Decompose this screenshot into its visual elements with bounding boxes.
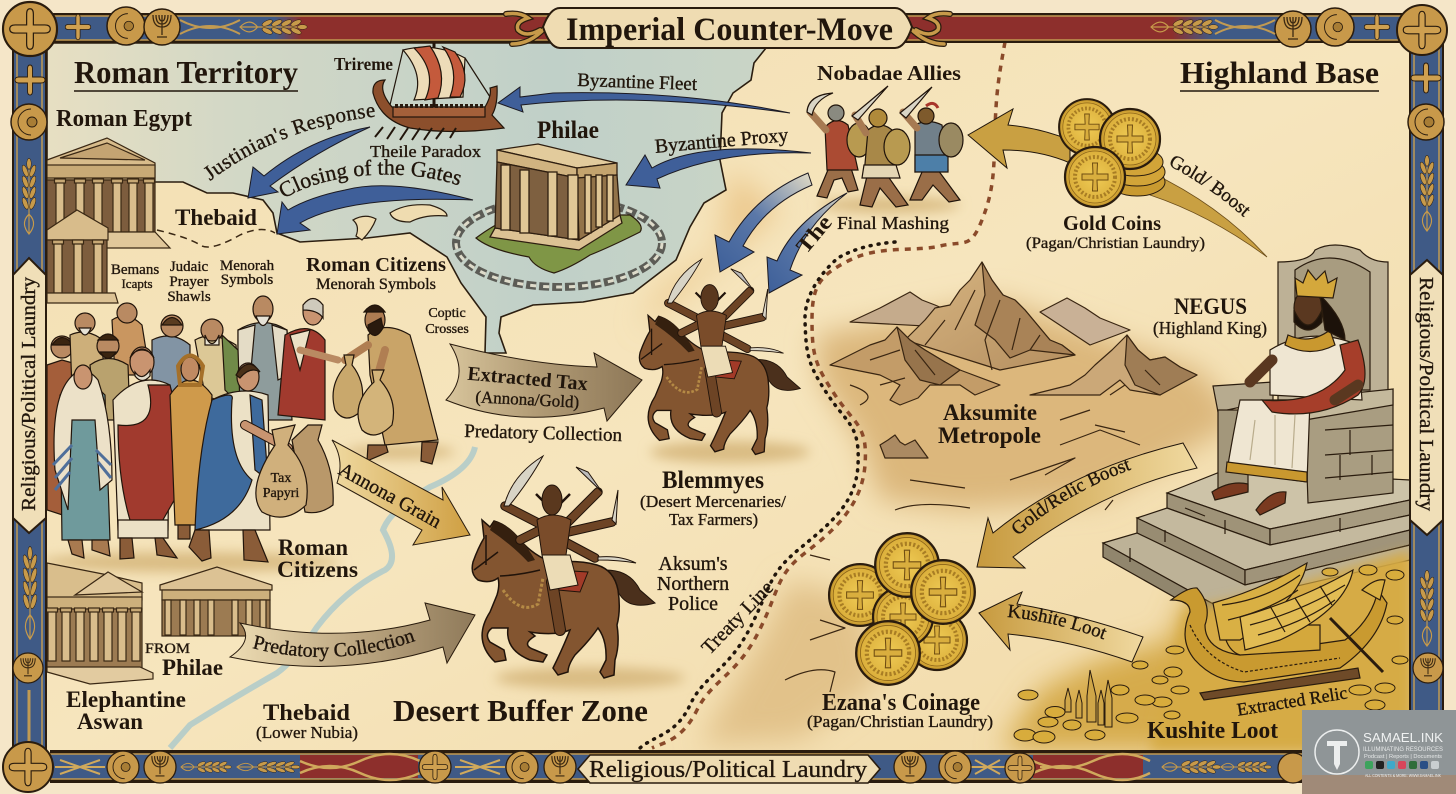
label: Tax Papyri xyxy=(263,471,299,501)
label: Blemmyes: Tax Farmers) xyxy=(669,510,758,529)
label: Final Mashing: Final Mashing xyxy=(837,213,949,233)
man in blue toga with bags xyxy=(189,363,288,562)
label: Menorah Symbols: Symbols xyxy=(221,272,273,288)
label: Extracted Tax: Extracted Tax xyxy=(467,363,589,395)
label: Kushite Loot on arrow: Kushite Loot xyxy=(1007,604,1107,640)
label: Blemmyes: (Desert Mercenaries/ xyxy=(640,492,786,511)
head and crown xyxy=(1294,289,1322,327)
torso xyxy=(1270,336,1362,400)
illustration: Philae temple lower xyxy=(160,567,272,636)
label: Trireme: Trireme xyxy=(334,54,393,74)
label: Extracted Tax: (Annona/Gold) xyxy=(475,387,580,412)
label: Ezana's Coinage: Ezana's Coinage xyxy=(822,690,980,716)
arrow: gold to Nobadae xyxy=(968,109,1070,168)
label: Aksumite Metropole: Metropole xyxy=(938,423,1041,448)
label: Theile Paradox: Theile Paradox xyxy=(370,142,482,161)
arrow: Closing of the Gates xyxy=(277,186,473,234)
illustration: Philae island temple in chains xyxy=(456,144,662,287)
label: Aksumite Metropole xyxy=(938,400,1041,448)
illustration: Aksumite mountains xyxy=(785,262,1197,692)
label: Byzantine Proxy: Byzantine Proxy xyxy=(654,124,789,158)
woman with prayer shawl xyxy=(53,365,112,558)
label: Judaic Prayer Shawls: Prayer xyxy=(169,274,209,290)
arrow: Justinian's Response xyxy=(248,127,370,198)
frame: top border band xyxy=(50,7,1410,47)
label: Desert Buffer Zone: Desert Buffer Zone xyxy=(393,693,648,728)
islands in the sea xyxy=(353,205,447,240)
arrow: Byzantine Fleet xyxy=(498,87,790,113)
label: Extracted Relic: Extracted Relic xyxy=(1235,682,1349,720)
label: Menorah Symbols xyxy=(220,258,275,288)
title plaque xyxy=(506,8,950,48)
label: NEGUS: NEGUS xyxy=(1174,294,1247,319)
label: Roman Citizens upper: Roman Citizens xyxy=(306,254,446,276)
watermark: Samael.ink: Podcast | Reports | Documents xyxy=(1364,754,1442,760)
label: FROM Philae: FROM xyxy=(145,641,190,657)
back row left figures xyxy=(47,303,240,520)
side plaque right: Religious/Political Laundry xyxy=(1415,277,1437,511)
label: Aksum's Northern Police: Northern xyxy=(657,573,729,595)
arrow: The Final Mashing xyxy=(767,193,847,293)
arrow: Nobadae to Blemmyes xyxy=(715,173,812,272)
illustration: Ezana's coinage pile xyxy=(829,533,975,685)
label: Roman Citizens upper: Menorah Symbols xyxy=(316,276,436,293)
sandals xyxy=(1212,483,1286,515)
label: Aksum's Northern Police xyxy=(657,553,729,615)
label: FROM Philae: Philae xyxy=(162,655,223,680)
illustration: Nobadae allied soldiers xyxy=(807,86,963,207)
label: Judaic Prayer Shawls: Shawls xyxy=(167,289,211,305)
label: Coptic Crosses xyxy=(425,306,469,337)
label: Predatory Collection lower: Predatory Collection xyxy=(252,632,416,662)
side plaque right xyxy=(1410,260,1443,535)
illustration: crowd of Roman citizens xyxy=(47,296,438,562)
side plaque left xyxy=(13,258,46,533)
label: Bemans Icapts xyxy=(111,262,159,291)
label: Judaic Prayer Shawls: Judaic xyxy=(170,259,208,275)
temple xyxy=(490,144,622,250)
label: Predatory Collection upper: Predatory Collection xyxy=(464,421,623,446)
arrow: Byzantine Proxy xyxy=(626,149,811,188)
soldier blue xyxy=(900,87,963,202)
label: Thebaid Lower Nubia: (Lower Nubia) xyxy=(256,723,358,742)
label: Elephantine Aswan: Aswan xyxy=(77,709,143,734)
label: Coptic Crosses: Crosses xyxy=(425,322,469,337)
label: Philae temple: Philae xyxy=(537,117,599,144)
label: Menorah Symbols: Menorah xyxy=(220,258,275,274)
illustration: Elephantine temple lower left xyxy=(46,563,153,684)
label: Gold Coins: Gold Coins xyxy=(1063,211,1161,235)
watermark: Samael.ink: SAMAEL.INK xyxy=(1363,730,1443,745)
label: Extracted Tax xyxy=(467,363,589,412)
island xyxy=(476,215,641,273)
label: Gold/Relic Boost: Gold/Relic Boost xyxy=(1012,460,1132,534)
woman in orange xyxy=(170,356,212,539)
stone steps xyxy=(1103,470,1410,620)
back row figure grey robe xyxy=(238,296,292,420)
illustration: Negus on stone throne xyxy=(1103,245,1410,620)
label: FROM Philae xyxy=(145,641,223,680)
label: Tax Papyri: Papyri xyxy=(263,486,299,501)
robe xyxy=(1227,400,1310,482)
ground shadows under figures xyxy=(40,197,960,689)
label: Bemans Icapts: Bemans xyxy=(111,262,159,278)
map: coast dashed frontier xyxy=(157,229,275,247)
title plaque: Imperial Counter-Move xyxy=(566,12,893,48)
label: The: The xyxy=(791,210,837,258)
label: Kushite Loot: Kushite Loot xyxy=(1147,718,1278,744)
throne back xyxy=(1278,245,1388,400)
side plaque left: Religious/Political Laundry xyxy=(18,277,40,511)
panel: Aksumite highlands shading xyxy=(640,170,1240,745)
label: Annona Grain: Annona Grain xyxy=(335,459,445,533)
label: Justinian's Response: Justinian's Response xyxy=(204,107,375,181)
panel: gold around the relic xyxy=(1150,550,1411,750)
sacks of coin xyxy=(333,355,394,435)
illustration: Byzantine trireme xyxy=(373,30,504,140)
illustration: gold coins stack xyxy=(1059,99,1165,207)
label: Thebaid Lower Nubia: Thebaid xyxy=(263,700,350,725)
illustration: Blemmyes rider on horse (upper) xyxy=(639,259,800,454)
iron chain xyxy=(456,199,662,287)
tax collector with sacks xyxy=(345,305,438,464)
arrow: Extracted Tax xyxy=(446,344,642,421)
soldier red xyxy=(807,93,871,198)
label: NEGUS: (Highland King) xyxy=(1153,318,1267,339)
label: Roman Citizens lower xyxy=(277,535,358,582)
label: Ezana's Coinage xyxy=(807,690,993,731)
label: Aksum's Northern Police: Aksum's xyxy=(658,553,728,575)
watermark: Samael.ink xyxy=(1302,710,1456,794)
label: NEGUS xyxy=(1153,294,1267,339)
label: Tax Papyri: Tax xyxy=(271,471,291,486)
river Nile lower xyxy=(170,447,475,748)
label: Roman Citizens lower: Citizens xyxy=(277,557,358,582)
elder in red toga xyxy=(278,298,338,420)
heading: Highland Base: Highland Base xyxy=(1180,55,1379,90)
label: Judaic Prayer Shawls xyxy=(167,259,211,305)
label: Roman Citizens upper xyxy=(306,254,446,293)
panel: gold loot ground xyxy=(1000,530,1411,750)
label: Closing of the Gates: Closing of the Gates xyxy=(280,159,461,196)
arrow: Annona Grain xyxy=(332,440,470,545)
label: Coptic Crosses: Coptic xyxy=(428,306,466,321)
label: Elephantine Aswan xyxy=(66,687,186,734)
label: Thebaid: Thebaid xyxy=(175,205,257,230)
label: Byzantine Fleet: Byzantine Fleet xyxy=(577,70,698,95)
arrow: Predatory Collection xyxy=(230,603,475,666)
man with red toga xyxy=(113,347,181,559)
bottom plaque: Religious/Political Laundry xyxy=(589,757,867,783)
throne arms and blocks xyxy=(1213,382,1273,412)
Tax Papyri sacks xyxy=(256,425,333,517)
label: Blemmyes xyxy=(640,467,786,529)
illustration: Roman temples upper left xyxy=(47,138,170,303)
illustration: extracted relic golden swan boat xyxy=(1171,563,1387,700)
label: Nobadae Allies: Nobadae Allies xyxy=(817,61,961,85)
heading: Roman Territory: Roman Territory xyxy=(74,54,298,90)
watermark: Samael.ink: ILLUMINATING RESOURCES xyxy=(1363,746,1444,753)
illustration: Aksum's northern police rider (lower) xyxy=(472,456,655,678)
frame: bottom border band xyxy=(50,750,1408,783)
label: Elephantine Aswan: Elephantine xyxy=(66,687,186,712)
frame: right border band xyxy=(1408,43,1444,751)
label: Aksum's Northern Police: Police xyxy=(668,593,718,615)
arrow: Kushite Loot xyxy=(979,592,1143,662)
label: Roman Egypt: Roman Egypt xyxy=(56,106,192,132)
arms xyxy=(1250,360,1358,400)
label: Roman Citizens lower: Roman xyxy=(278,535,348,560)
arrow: Gold/Relic Boost xyxy=(977,443,1197,568)
label: Blemmyes: Blemmyes xyxy=(662,467,764,494)
soldier gold xyxy=(852,86,910,207)
label: Bemans Icapts: Icapts xyxy=(121,276,153,291)
panel: sea xyxy=(47,43,770,353)
label: Thebaid Lower Nubia xyxy=(256,700,358,742)
label: Gold Coins xyxy=(1026,211,1205,252)
label: Treaty Line: Treaty Line xyxy=(697,577,778,659)
arrow: Gold Boost tail xyxy=(1150,172,1267,257)
label: Gold Boost: Gold/ Boost xyxy=(1170,156,1250,218)
frame: left border band xyxy=(11,43,47,751)
label: Gold Coins: (Pagan/Christian Laundry) xyxy=(1026,235,1205,252)
illustration: Kushite treasure coins and bullets xyxy=(1014,565,1408,743)
label: Ezana's Coinage: (Pagan/Christian Laundry) xyxy=(807,712,993,731)
label: Aksumite Metropole: Aksumite xyxy=(943,400,1037,425)
map: treaty line xyxy=(640,42,1005,748)
